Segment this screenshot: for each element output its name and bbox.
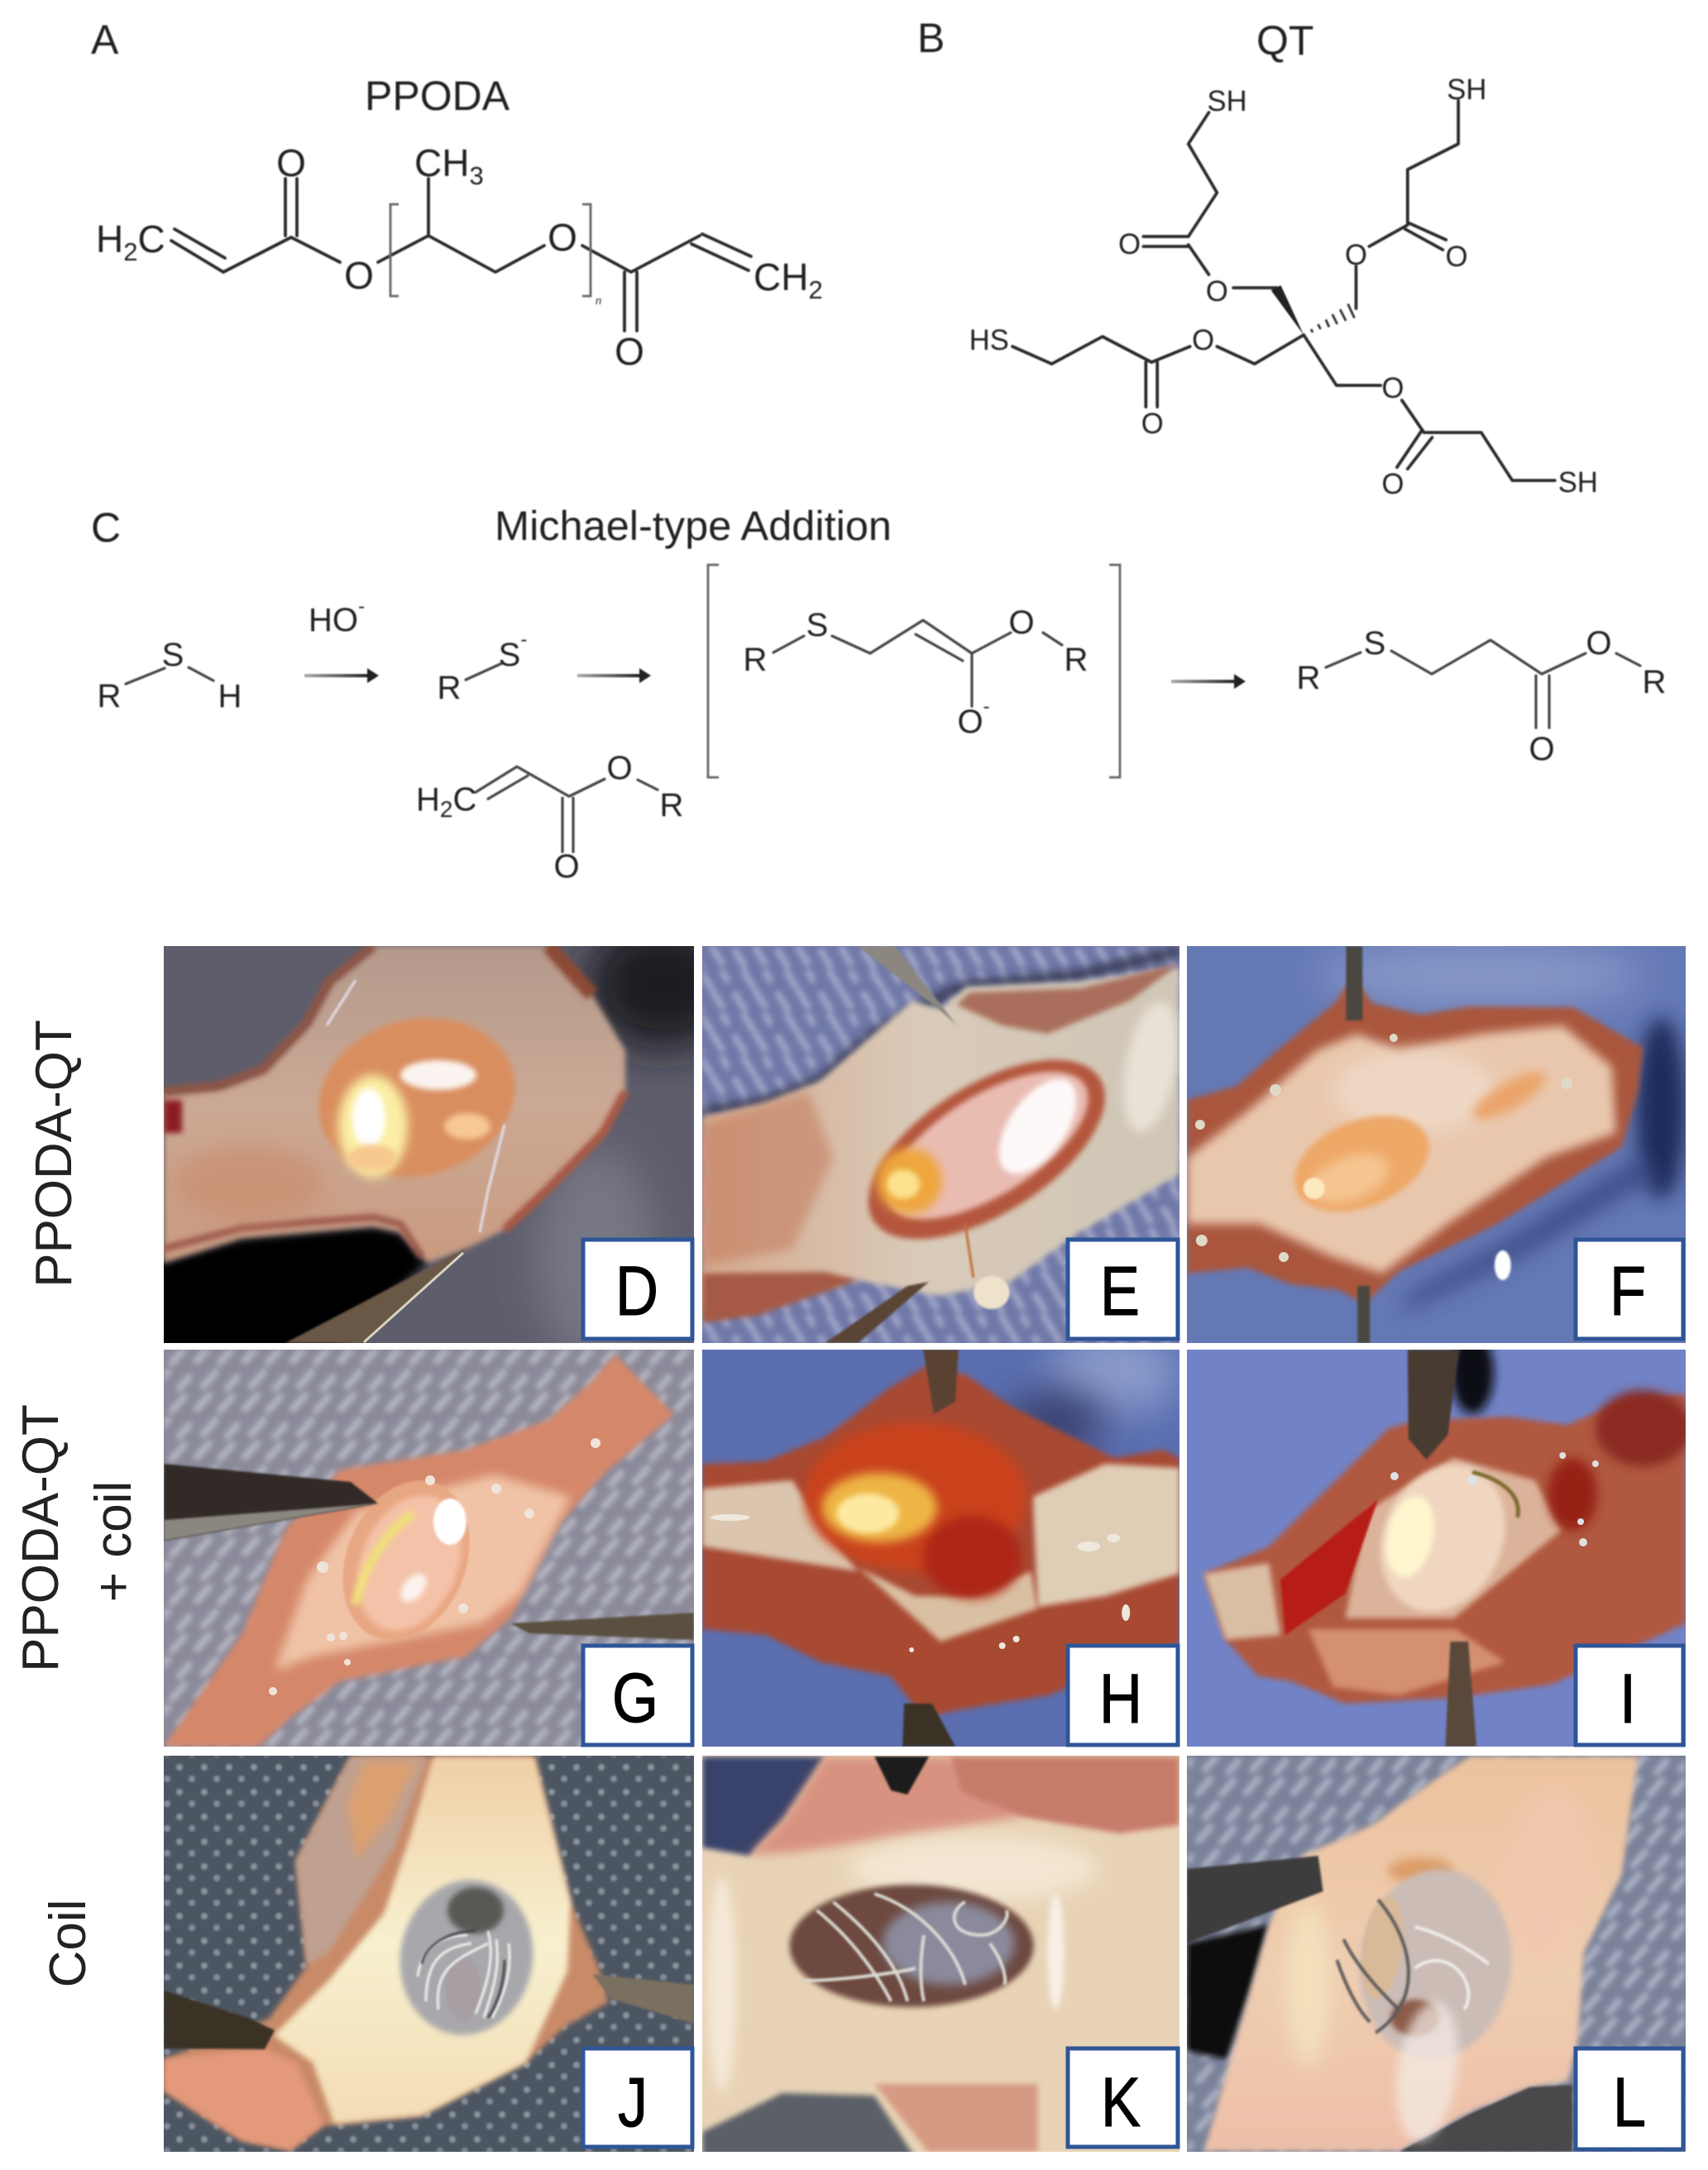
photo panel K <box>702 1756 1179 2158</box>
aneurysm with gel <box>865 1056 1108 1243</box>
arrow 1 <box>304 668 379 683</box>
vessel <box>702 968 1179 1312</box>
acrylate reactant: O <box>553 848 580 885</box>
gel and aneurysm <box>342 1480 470 1640</box>
thioether product: R <box>1643 664 1666 700</box>
vessel <box>1204 1393 1686 1704</box>
coil-filled aneurysm <box>1337 1859 1524 2069</box>
forceps <box>285 1247 468 1343</box>
forceps right <box>592 1974 694 2024</box>
acrylate reactant: H <box>416 781 440 818</box>
chemical structure: PPODA: C <box>137 217 165 260</box>
thioether product: O <box>1586 625 1612 662</box>
speckled highlight <box>1389 1998 1466 2145</box>
bracketed enolate intermediate <box>708 565 1120 777</box>
thioether product: S <box>1364 625 1385 662</box>
vessel <box>1187 976 1643 1304</box>
thioether product: O <box>1529 731 1555 767</box>
label box H <box>1068 1646 1178 1745</box>
chemical structure: QT: SH <box>1558 466 1598 499</box>
chemical structure: QT: SH <box>1208 85 1247 117</box>
forceps top <box>1408 1350 1459 1460</box>
chemical structure: PPODA: n <box>596 294 601 307</box>
bracketed enolate intermediate: - <box>983 695 990 718</box>
chemical structure: QT: SH <box>1447 74 1486 106</box>
chemical structure: QT: HS <box>969 324 1009 356</box>
row label: PPODA-QT + coil <box>12 1404 142 1672</box>
bracketed enolate intermediate: S <box>806 607 828 643</box>
label box K <box>1068 2048 1178 2147</box>
gel mass <box>1291 1111 1433 1215</box>
thiolate R-S-: R <box>438 670 461 706</box>
chemical structure: PPODA: CH <box>754 256 808 299</box>
chemical structure: QT: O <box>1141 408 1164 440</box>
label box E <box>1068 1240 1178 1339</box>
reactant: thiol R-S-H: H <box>218 678 242 715</box>
panel A: PPODA structure <box>91 17 823 373</box>
panel letter B: B <box>917 15 945 61</box>
label box D: D <box>615 1252 658 1330</box>
label box I: I <box>1619 1660 1636 1737</box>
label box G <box>583 1646 692 1745</box>
coil-filled aneurysm <box>790 1885 1034 2007</box>
chemical structure: PPODA: H <box>96 217 123 260</box>
thiolate R-S-: S <box>499 637 520 673</box>
chemical structure: QT: O <box>1382 372 1404 404</box>
chemical structure: PPODA <box>96 141 823 373</box>
vessel <box>1204 1757 1638 2151</box>
row label: PPODA-QT: PPODA-QT <box>26 1020 83 1288</box>
heading: Michael-type Addition: Michael-type Addition <box>495 502 892 549</box>
thiolate R-S- <box>438 629 527 706</box>
chemical structure: QT: O <box>1192 324 1214 356</box>
photo panel L <box>1187 1756 1686 2152</box>
row label: PPODA-QT + coil: PPODA-QT <box>12 1404 69 1672</box>
label box L <box>1576 2048 1683 2149</box>
photo panel H <box>702 1331 1179 1747</box>
forceps bottom <box>902 1704 955 1747</box>
bracketed enolate intermediate: R <box>1065 642 1088 678</box>
forceps left <box>164 1464 378 1541</box>
bracketed enolate intermediate: R <box>744 642 767 678</box>
chemical structure: PPODA: O <box>276 141 306 184</box>
photo panel I <box>1187 1331 1691 1747</box>
reagent: hydroxide HO-: HO <box>309 602 358 638</box>
label box I <box>1576 1646 1683 1745</box>
panel C: Michael-type addition scheme <box>91 502 1666 885</box>
coil-filled aneurysm <box>388 1870 545 2045</box>
panel B: QT structure <box>917 15 1598 500</box>
gel mass in aneurysm <box>316 1016 518 1183</box>
thiolate R-S-: - <box>520 629 527 651</box>
label box J: J <box>618 2063 648 2141</box>
label box L: L <box>1613 2063 1646 2141</box>
label box E: E <box>1100 1252 1140 1330</box>
photo panel F <box>1187 943 1686 1343</box>
chemical structure: PPODA: O <box>548 216 577 259</box>
forceps <box>1187 1856 1323 1943</box>
forceps <box>874 1757 929 1795</box>
chemical structure: PPODA: 2 <box>808 275 823 304</box>
label box H: H <box>1099 1660 1142 1737</box>
label box F: F <box>1610 1252 1646 1330</box>
arrow 3 <box>1171 674 1246 689</box>
chemical structure: PPODA: 2 <box>123 237 137 266</box>
vessel <box>164 946 625 1263</box>
arrow 2 <box>577 668 651 683</box>
photo panel D <box>164 946 694 1343</box>
label box G: G <box>612 1659 658 1737</box>
reactant: thiol R-S-H: S <box>162 637 184 673</box>
bracketed enolate intermediate: O <box>957 704 983 740</box>
photo panel E <box>702 946 1186 1343</box>
heading: PPODA: PPODA <box>365 73 510 119</box>
chemical structure: PPODA: O <box>344 254 374 297</box>
blood <box>1280 1499 1378 1635</box>
chemical structure: QT: O <box>1446 241 1468 273</box>
chemical structure: QT: O <box>1118 228 1141 260</box>
acrylate reactant: C <box>452 781 476 818</box>
vessel <box>164 1757 609 2150</box>
bracketed enolate intermediate: O <box>1008 605 1035 641</box>
reactant: thiol R-S-H <box>98 637 242 715</box>
photo panel G <box>164 1350 694 1747</box>
thioether product <box>1297 625 1666 767</box>
forceps <box>1346 946 1370 1343</box>
vessel <box>164 1355 674 1747</box>
heading: QT: QT <box>1256 17 1313 64</box>
row label: Coil: Coil <box>40 1900 97 1987</box>
forceps bottom <box>1445 1642 1476 1747</box>
acrylate reactant <box>416 750 683 885</box>
chemical structure: PPODA: CH <box>414 141 469 184</box>
label box K: K <box>1101 2063 1141 2141</box>
gel mass <box>1357 1444 1529 1632</box>
forceps right <box>510 1613 694 1640</box>
label box F <box>1576 1240 1683 1339</box>
reagent: hydroxide HO-: - <box>358 595 365 618</box>
chemical structure: QT <box>969 74 1598 500</box>
gel in red aneurysm <box>805 1422 1027 1599</box>
acrylate reactant: R <box>660 787 683 824</box>
label box J <box>583 2048 692 2147</box>
photo panel J <box>164 1756 694 2152</box>
reactant: thiol R-S-H: R <box>98 678 121 715</box>
label box D <box>583 1240 692 1339</box>
forceps left <box>164 1991 275 2049</box>
panel letter C: C <box>91 504 121 551</box>
chemical structure: PPODA: 3 <box>469 161 484 190</box>
chemical structure: QT: O <box>1206 275 1228 308</box>
chemical structure: QT: O <box>1345 239 1367 271</box>
forceps top <box>923 1350 959 1414</box>
acrylate reactant: O <box>606 750 633 786</box>
row label: PPODA-QT + coil: + coil <box>85 1481 142 1602</box>
panel letter A: A <box>91 17 119 63</box>
chemical structure: PPODA: O <box>615 330 644 373</box>
thioether product: R <box>1297 660 1320 696</box>
acrylate reactant: 2 <box>440 796 452 822</box>
vessel <box>702 1365 1179 1718</box>
forceps top <box>858 946 957 1025</box>
chemical structure: QT: O <box>1382 468 1404 500</box>
